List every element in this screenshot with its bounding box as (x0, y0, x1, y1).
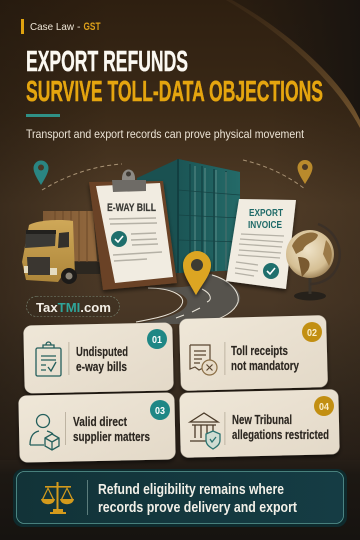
panel: new tribunal allegations restricted: allegations restricted (232, 427, 329, 442)
header tag: - (77, 21, 81, 33)
panel: toll receipts not mandatory (179, 315, 328, 391)
header tag: GST (84, 21, 101, 33)
header tag: Case Law (30, 21, 74, 33)
export invoice: INVOICE (248, 219, 282, 231)
badge 01 (147, 329, 167, 349)
panel: valid direct supplier matters: Valid direct (73, 414, 128, 429)
panel: undisputed e-way bills (23, 322, 174, 394)
conclusion banner: Refund eligibility remains where (98, 482, 284, 498)
badge 02: 02 (307, 327, 317, 339)
conclusion banner (13, 469, 347, 527)
teal rule (26, 114, 60, 117)
panel: new tribunal allegations restricted (179, 389, 340, 458)
shipping container (137, 159, 240, 273)
export invoice (226, 199, 296, 289)
panel: new tribunal allegations restricted: New Tribunal (232, 412, 292, 427)
badge 03 (150, 400, 170, 420)
title: EXPORT REFUNDS (26, 46, 188, 78)
subtitle: Transport and export records can prove physical movement (26, 127, 305, 141)
conclusion banner: records prove delivery and export (98, 500, 297, 516)
icon: checklist clipboard (36, 342, 61, 376)
panel: valid direct supplier matters (18, 392, 176, 463)
header tag (21, 19, 101, 34)
panel: toll receipts not mandatory: not mandatory (231, 358, 300, 373)
globe (286, 224, 340, 300)
icon: amber map pin (183, 251, 211, 295)
clipboard: E-way bill (89, 170, 177, 290)
badge 01: 01 (152, 334, 162, 346)
illustration (22, 159, 340, 324)
icon: teal location pin (34, 161, 48, 185)
panel: undisputed e-way bills: Undisputed (76, 344, 128, 359)
icon: person with parcel (30, 414, 59, 450)
road (135, 274, 240, 324)
panel: valid direct supplier matters: supplier matters (73, 429, 150, 444)
truck (22, 211, 100, 284)
badge 03: 03 (155, 405, 165, 417)
TaxTMI logo (26, 296, 120, 316)
icon: courthouse with shield (190, 413, 220, 449)
export invoice: EXPORT (249, 207, 283, 219)
badge 04: 04 (319, 401, 329, 413)
route dashes (42, 160, 305, 190)
panel: undisputed e-way bills: e-way bills (76, 359, 127, 374)
icon: receipt with cross (190, 345, 217, 375)
panel: toll receipts not mandatory: Toll receipts (231, 343, 288, 358)
title (26, 46, 323, 108)
clipboard: E-way bill: E-WAY BILL (107, 202, 156, 214)
badge 04 (314, 396, 334, 416)
icon: amber location pin (298, 160, 312, 184)
icon: scales of justice (41, 482, 74, 514)
TaxTMI logo: TaxTMI.com (36, 301, 111, 315)
badge 02 (302, 322, 322, 342)
